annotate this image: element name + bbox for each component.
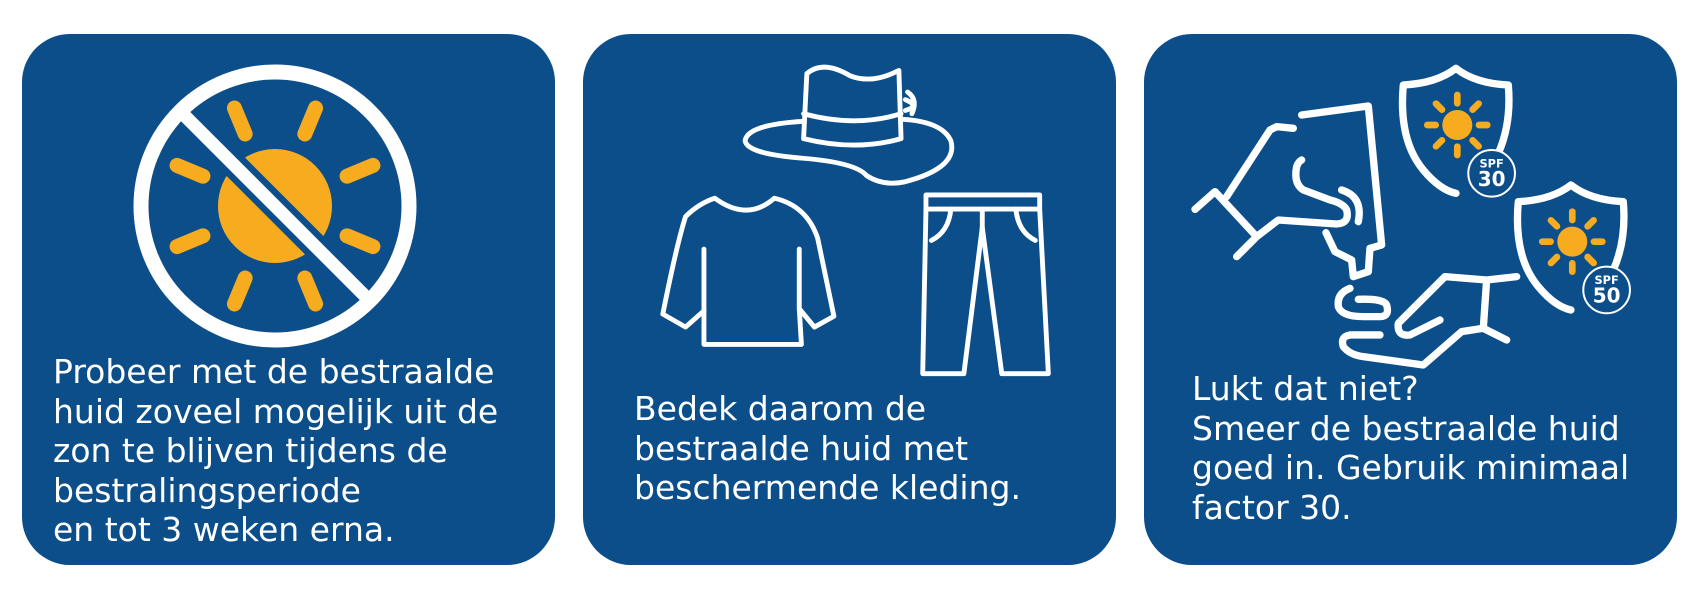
shield 30: SPF [1480, 156, 1504, 170]
shield 30: 30 [1478, 167, 1506, 191]
text: avoid sun: Probeer met de bestraalde [53, 352, 494, 391]
shield 30 [1402, 68, 1515, 197]
text: clothing: beschermende kleding. [634, 468, 1021, 507]
text: sunscreen: goed in. Gebruik minimaal [1192, 448, 1629, 487]
text: clothing [634, 389, 1021, 507]
text: avoid sun: bestralingsperiode [53, 470, 361, 510]
panel: sunscreen [1144, 34, 1677, 565]
shield 50: SPF [1595, 273, 1619, 287]
text: avoid sun: en tot 3 weken erna. [53, 510, 395, 549]
icon: no sun [141, 72, 409, 340]
icon: clothing [663, 67, 1048, 374]
panel: avoid sun [22, 34, 555, 565]
icon: sunscreen [1195, 68, 1630, 365]
text: avoid sun: zon te blijven tijdens de [53, 431, 448, 470]
text: avoid sun: huid zoveel mogelijk uit de [53, 392, 498, 430]
shield 50 [1517, 185, 1630, 313]
text: sunscreen [1192, 369, 1629, 526]
text: clothing: Bedek daarom de [634, 389, 926, 428]
shield 50: 50 [1593, 284, 1621, 308]
text: avoid sun [53, 352, 498, 549]
panel: clothing [583, 34, 1116, 565]
text: sunscreen: Lukt dat niet? [1192, 369, 1419, 408]
text: clothing: bestraalde huid met [634, 428, 968, 468]
text: sunscreen: factor 30. [1192, 488, 1352, 526]
text: sunscreen: Smeer de bestraalde huid [1192, 408, 1620, 448]
